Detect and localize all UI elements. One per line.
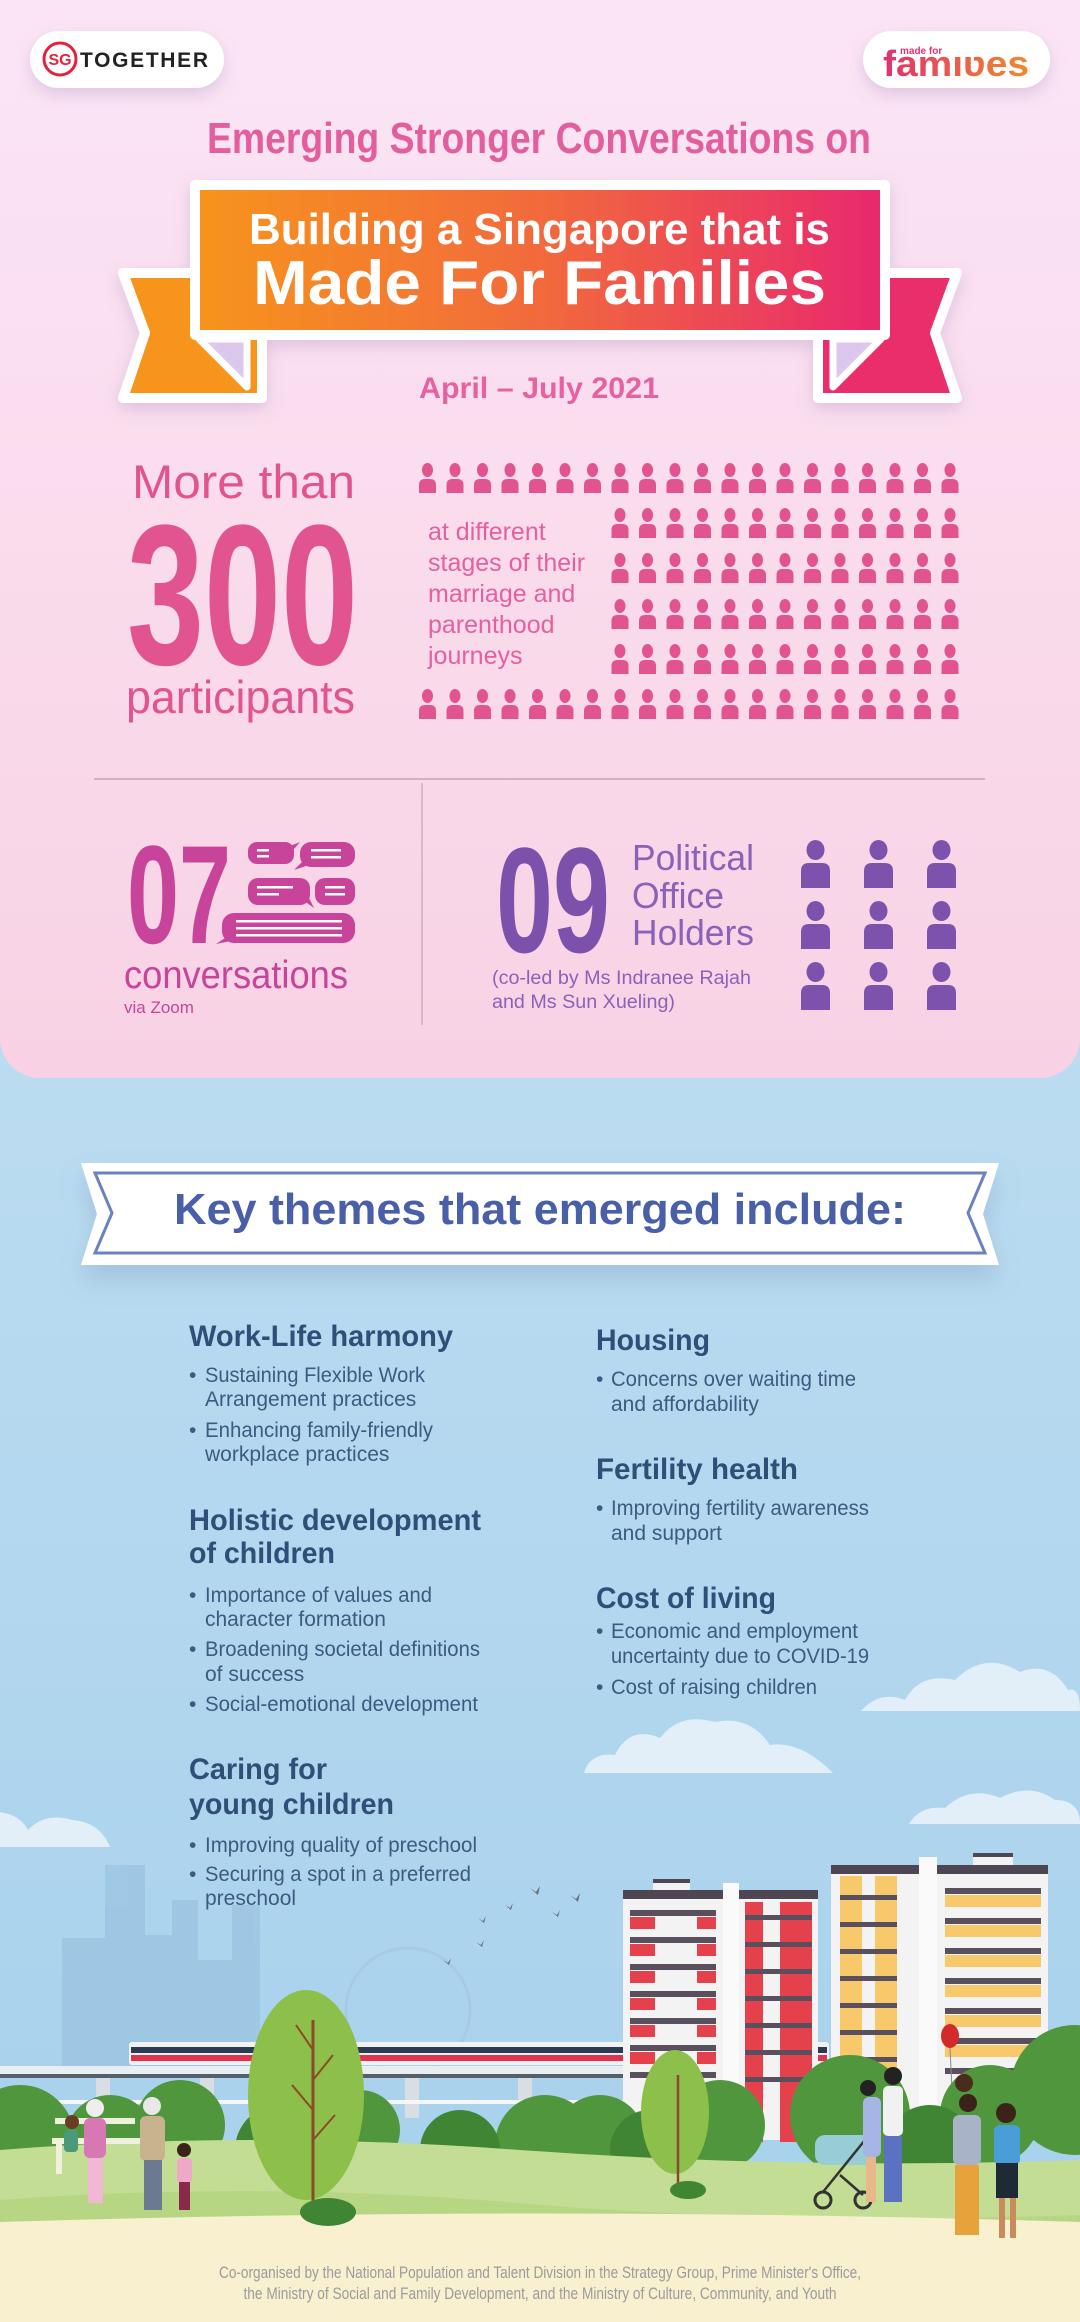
theme: caring for young children: • <box>189 1834 196 1857</box>
theme: fertility health: Fertility health <box>596 1453 798 1486</box>
lawn <box>0 2140 1080 2230</box>
participants description <box>427 518 585 670</box>
themes: left column <box>189 1320 481 1910</box>
stat: 09 political office holders <box>492 816 754 1013</box>
theme: housing: and affordability <box>611 1393 759 1416</box>
stat: 300 participants: More than <box>132 455 355 508</box>
themes: right column <box>596 1324 869 1699</box>
theme: work-life harmony <box>189 1320 453 1466</box>
footer credits: Co-organised by the National Population and Talent Division in the Strategy Group, Prime Minister's Office, <box>219 2263 861 2282</box>
theme: holistic development: Holistic development <box>189 1504 481 1537</box>
stat: 09 political office holders: and Ms Sun Xueling) <box>492 992 675 1013</box>
stat: 09 political office holders: (co-led by Ms Indranee Rajah <box>492 968 751 989</box>
theme: work-life harmony: Work-Life harmony <box>189 1320 453 1353</box>
theme: cost of living: Economic and employment <box>611 1620 858 1643</box>
theme: cost of living: Cost of raising children <box>611 1676 817 1699</box>
theme: cost of living: Cost of living <box>596 1582 776 1615</box>
birds <box>443 1886 580 1965</box>
panel: summary card <box>0 0 1080 1078</box>
footer credits: the Ministry of Social and Family Development, and the Ministry of Culture, Community, and Youth <box>244 2284 836 2303</box>
clouds <box>0 1663 1080 1847</box>
theme: caring for young children: Securing a spot in a preferred <box>205 1863 471 1886</box>
tree: small <box>641 2050 709 2199</box>
footer credits <box>219 2263 861 2303</box>
theme: holistic development: • <box>189 1584 196 1607</box>
sand ground <box>0 2214 1080 2322</box>
tree: big <box>248 1990 364 2226</box>
logo: made for families: made for <box>900 46 942 57</box>
theme: fertility health: and support <box>611 1522 722 1545</box>
theme: caring for young children <box>189 1753 477 1910</box>
theme: work-life harmony: • <box>189 1364 196 1387</box>
stat: 09 political office holders: Holders <box>632 912 754 953</box>
faded skyline <box>62 1865 260 2070</box>
theme: caring for young children: • <box>189 1863 196 1886</box>
logo: SG Together: TOGETHER <box>80 49 208 72</box>
icon grid: 9 office holders <box>801 840 956 1010</box>
theme: caring for young children: preschool <box>205 1887 296 1910</box>
theme: holistic development: • <box>189 1693 196 1716</box>
bushes <box>0 2025 1080 2195</box>
theme: holistic development: character formation <box>205 1608 386 1631</box>
theme: fertility health: Improving fertility awareness <box>611 1497 869 1520</box>
balloon <box>941 2024 959 2090</box>
theme: holistic development: Broadening societal definitions <box>205 1638 480 1661</box>
theme: work-life harmony: Enhancing family-friendly <box>205 1419 433 1442</box>
theme: holistic development: Importance of values and <box>205 1584 432 1607</box>
stat: 09 political office holders: 09 <box>496 816 610 984</box>
stat: 09 political office holders: Office <box>632 875 724 916</box>
title banner: Building a Singapore that is <box>249 205 830 254</box>
theme: work-life harmony: Sustaining Flexible Work <box>205 1364 425 1387</box>
theme: cost of living <box>596 1582 869 1699</box>
stat: 300 participants: participants <box>126 671 355 723</box>
stat: 07 conversations: conversations <box>124 954 348 997</box>
participant icon grid <box>419 463 958 719</box>
participants description: marriage and <box>428 580 575 608</box>
logo: SG Together <box>30 31 224 88</box>
theme: fertility health <box>596 1453 869 1545</box>
theme: holistic development: of children <box>189 1537 335 1570</box>
illustration: city park scene <box>0 1853 1080 2322</box>
theme: cost of living: • <box>596 1676 603 1699</box>
theme: housing: • <box>596 1368 603 1391</box>
participants description: journeys <box>427 642 522 670</box>
stat: 300 participants <box>126 455 358 723</box>
theme: caring for young children: young children <box>189 1788 394 1821</box>
subtitle: Emerging Stronger Conversations on <box>207 114 871 163</box>
participants description: at different <box>428 518 546 546</box>
theme: holistic development: Social-emotional development <box>205 1693 478 1716</box>
people: grandparents with children <box>52 2097 192 2210</box>
theme: cost of living: uncertainty due to COVID-19 <box>611 1645 869 1668</box>
theme: work-life harmony: • <box>189 1419 196 1442</box>
heading ribbon: key themes: Key themes that emerged include: <box>174 1185 906 1234</box>
people: family with stroller <box>815 2067 1020 2238</box>
logo: made for families: famıʋes <box>883 43 1029 84</box>
theme: housing: Housing <box>596 1324 710 1357</box>
theme: holistic development: • <box>189 1638 196 1661</box>
stat: 07 conversations: via Zoom <box>124 998 194 1017</box>
HDB blocks <box>623 1853 1048 2142</box>
theme: work-life harmony: Arrangement practices <box>205 1388 416 1411</box>
theme: housing <box>596 1324 856 1416</box>
title banner: Made For Families <box>253 249 826 318</box>
train and viaduct <box>0 2042 829 2118</box>
theme: holistic development: of success <box>205 1663 304 1686</box>
stat: 07 conversations <box>124 816 348 1017</box>
icon: chat bubbles <box>216 842 355 944</box>
theme: fertility health: • <box>596 1497 603 1520</box>
stat: 07 conversations: 07 <box>127 816 231 973</box>
theme: caring for young children: Caring for <box>189 1753 327 1786</box>
theme: cost of living: • <box>596 1620 603 1643</box>
stat: 09 political office holders: Political <box>632 837 754 878</box>
participants description: parenthood <box>428 611 555 639</box>
theme: holistic development <box>189 1504 481 1716</box>
date: April – July 2021 <box>419 372 659 405</box>
stat: 300 participants: 300 <box>127 484 358 707</box>
logo: SG Together: SG <box>48 52 72 69</box>
heading ribbon: key themes <box>81 1163 999 1265</box>
participants description: stages of their <box>428 549 585 577</box>
theme: housing: Concerns over waiting time <box>611 1368 856 1391</box>
logo: made for families <box>863 31 1050 88</box>
theme: work-life harmony: workplace practices <box>204 1443 389 1466</box>
title banner <box>123 185 957 398</box>
theme: caring for young children: Improving quality of preschool <box>205 1834 477 1857</box>
